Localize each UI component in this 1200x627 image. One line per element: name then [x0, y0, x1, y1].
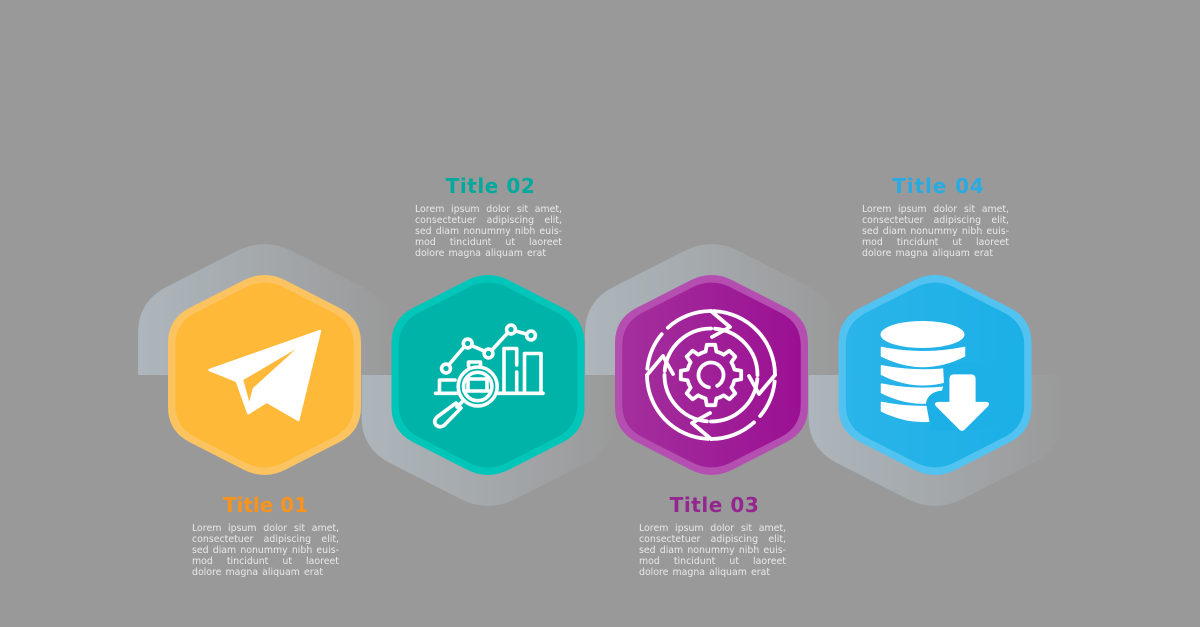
description: step 1: dolore magna aliquam erat	[192, 566, 323, 578]
text block: step 1	[192, 493, 339, 578]
description: step 3	[639, 522, 786, 578]
description: step 2: consectetuer adipiscing elit,	[415, 214, 562, 226]
description: step 3: consectetuer adipiscing elit,	[639, 534, 786, 544]
description: step 1: Lorem ipsum dolor sit amet,	[192, 522, 339, 534]
description: step 2	[415, 204, 562, 258]
description: step 1: mod tincidunt ut laoreet	[192, 556, 339, 566]
panel: step 3 purple hexagon	[615, 275, 808, 475]
description: step 3: Lorem ipsum dolor sit amet,	[639, 522, 786, 534]
description: step 1: consectetuer adipiscing elit,	[192, 534, 339, 544]
description: step 2: sed diam nonummy nibh euis-	[415, 226, 562, 236]
panel: step 4 blue hexagon	[838, 275, 1032, 475]
backdrop: half hexagon behind step 2	[362, 375, 562, 506]
icon: gear with circular arrows	[644, 308, 778, 442]
description: step 4: Lorem ipsum dolor sit amet,	[862, 204, 1009, 214]
description: step 2: dolore magna aliquam erat	[415, 248, 546, 258]
text block: step 2	[415, 174, 562, 258]
description: step 2: Lorem ipsum dolor sit amet,	[415, 204, 562, 214]
backdrop: half hexagon behind step 3	[585, 244, 786, 375]
panel: step 1 orange hexagon	[168, 275, 361, 475]
description: step 1	[192, 522, 339, 578]
hexagon timeline graphic	[138, 244, 1032, 506]
icon: paper plane	[210, 331, 320, 420]
description: step 3: mod tincidunt ut laoreet	[639, 556, 786, 566]
description: step 4	[862, 204, 1009, 258]
backdrop: half hexagon behind step 4	[808, 375, 1009, 506]
heading: Title 02: Title 02	[446, 174, 535, 198]
heading: Title 03: Title 03	[670, 493, 759, 517]
description: step 2: mod tincidunt ut laoreet	[415, 236, 562, 248]
heading: Title 01: Title 01	[223, 493, 308, 517]
description: step 3: sed diam nonummy nibh euis-	[639, 544, 786, 556]
icon: database with download arrow	[880, 321, 1000, 430]
description: step 4: sed diam nonummy nibh euis-	[862, 226, 1009, 236]
description: step 1: sed diam nonummy nibh euis-	[192, 544, 339, 556]
panel: step 2 teal hexagon	[392, 275, 584, 475]
text block: step 3	[639, 493, 786, 578]
description: step 4: mod tincidunt ut laoreet	[862, 236, 1009, 248]
description: step 3: dolore magna aliquam erat	[639, 566, 770, 578]
description: step 4: dolore magna aliquam erat	[862, 248, 993, 258]
description: step 4: consectetuer adipiscing elit,	[862, 214, 1009, 226]
icon: chart under magnifier	[435, 325, 543, 427]
text block: step 4	[862, 174, 1009, 258]
heading: Title 04: Title 04	[892, 174, 985, 198]
backdrop: half hexagon behind step 1	[138, 244, 338, 375]
